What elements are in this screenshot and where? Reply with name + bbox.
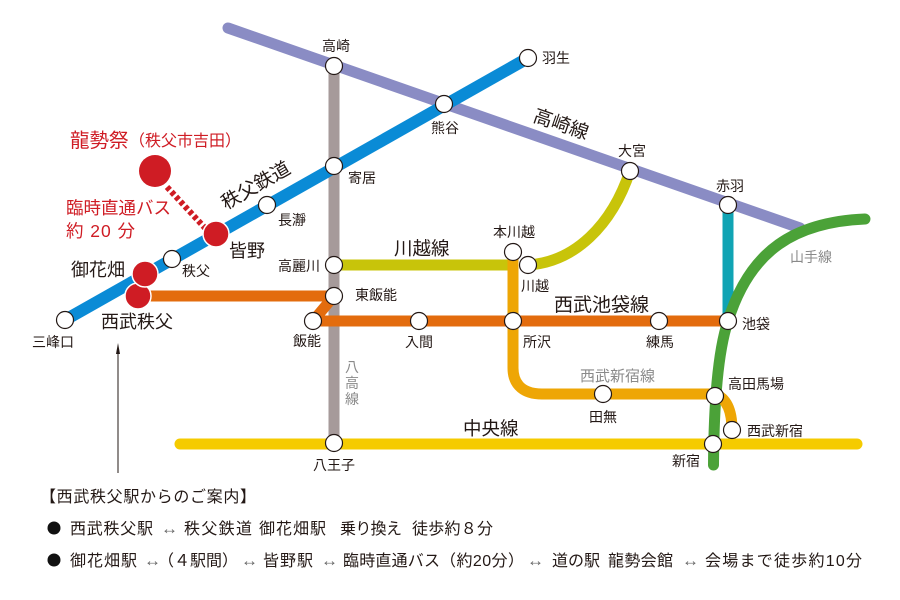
station: Komagawa: 高麗川 (278, 258, 320, 274)
station: Tokorozawa: 所沢 (523, 334, 551, 350)
label: Hachiko line: 高 (345, 375, 359, 391)
station: Mitsumineguchi (32, 312, 74, 350)
station: Akabane (716, 178, 744, 214)
station: Tokorozawa (504, 312, 551, 350)
guide: bus route: ↔ (241, 551, 258, 570)
guide: bus route: 御花畑駅 (70, 552, 137, 570)
station: Yorii: 寄居 (348, 170, 376, 186)
station: Seibu-Shinjuku: 西武新宿 (747, 423, 803, 439)
venue: Ryusei festival: （秩父市吉田） (129, 132, 241, 150)
station: Seibu-Chichibu (red): 西武秩父 (101, 312, 173, 332)
label: Chuo line: 中央線 (463, 418, 519, 439)
label: Chichibu railway: 秩父鉄道 (218, 157, 294, 214)
guide: bus route: 臨時直通バス (343, 552, 440, 570)
venue: Ryusei festival (70, 130, 241, 187)
station: Tanashi (589, 386, 617, 425)
station: Hanyu (520, 50, 570, 66)
station: Kumagaya (431, 96, 459, 136)
station: Shinjuku: 新宿 (672, 453, 700, 469)
guide: transfer route (48, 519, 493, 538)
guide: bus route: （約20分） (440, 552, 524, 570)
label: temporary bus (66, 198, 171, 241)
station: Hon-Kawagoe: 本川越 (493, 224, 535, 240)
station: Kawagoe (520, 256, 549, 294)
guide: bus route: 会場まで徒歩約10分 (705, 552, 862, 570)
station: Takasaki: 高崎 (322, 38, 350, 54)
station: Iruma (405, 312, 433, 350)
station: Hanno: 飯能 (293, 333, 321, 349)
station: Akabane: 赤羽 (716, 178, 744, 194)
label: temporary bus: 約 20 分 (66, 221, 136, 241)
guide: bus route: 龍勢会館 (608, 552, 673, 570)
station: Tanashi: 田無 (589, 409, 617, 425)
label: Seibu Shinjuku line: 西武新宿線 (580, 368, 655, 385)
guide: transfer route: ↔ (161, 519, 178, 538)
label: temporary bus: 臨時直通バス (66, 198, 171, 218)
line: Seibu Ikebukuro line (138, 296, 728, 321)
line: temporary bus route (167, 187, 205, 228)
station: Komagawa (278, 256, 342, 274)
venue: Ryusei festival: 龍勢祭 (70, 130, 129, 152)
guide: transfer route: 西武秩父駅 (70, 520, 153, 538)
line: Hachiko line (328, 66, 340, 443)
label: Takasaki line: 高崎線 (530, 105, 591, 144)
station: Minano (red): 皆野 (229, 241, 265, 261)
station: Nagatoro: 長瀞 (278, 212, 306, 228)
label: Hachiko line: 八 (345, 359, 359, 375)
station: Nerima (646, 312, 674, 350)
station: Hanyu: 羽生 (542, 50, 570, 66)
line: Kawagoe line (334, 171, 630, 265)
line: Chichibu railway (65, 58, 528, 320)
station: Ohanabatake (red): 御花畑 (71, 260, 125, 280)
station: Iruma: 入間 (405, 334, 433, 350)
guide: bus route: ↔ (144, 551, 161, 570)
station: Ikebukuro (720, 312, 770, 332)
station: Yorii (326, 158, 376, 186)
label: Hachiko line: 線 (345, 391, 359, 407)
guide: bus route: ↔ (682, 551, 699, 570)
station: Seibu-Shinjuku (724, 422, 803, 439)
guide: bus route: ↔ (527, 551, 544, 570)
station: Hanno (293, 312, 322, 349)
station: Higashi-Hanno (326, 287, 397, 304)
guide: bus route: （４駅間） (158, 552, 238, 570)
station: Hon-Kawagoe (493, 224, 535, 260)
station: Ikebukuro: 池袋 (742, 316, 770, 332)
station: Chichibu (164, 250, 210, 279)
station: Seibu-Chichibu (red) (101, 283, 173, 332)
station: Nerima: 練馬 (646, 334, 674, 350)
arrow: to Seibu-Chichibu (116, 343, 120, 473)
guide: transfer route: 徒歩約８分 (412, 520, 493, 538)
station: Shinjuku (672, 436, 722, 469)
line: Yamanote line (714, 219, 865, 465)
guide: transfer route: 秩父鉄道 (184, 520, 252, 538)
line: Seibu Shinjuku line (513, 252, 732, 430)
station: Takasaki (322, 38, 350, 74)
label: Seibu Ikebukuro line: 西武池袋線 (554, 294, 649, 316)
guide heading: 【西武秩父駅からのご案内】 (40, 488, 256, 506)
guide: bus route: ↔ (321, 551, 338, 570)
line: Takasaki line (228, 28, 800, 228)
station: Minano (red) (203, 221, 265, 261)
station: Kumagaya: 熊谷 (431, 120, 459, 136)
station: Ohanabatake (red) (71, 260, 158, 287)
label: Kawagoe line: 川越線 (394, 238, 450, 259)
station: Higashi-Hanno: 東飯能 (355, 287, 397, 303)
guide: transfer route: 乗り換え (340, 520, 402, 538)
station: Kawagoe: 川越 (521, 278, 549, 294)
station: Hachioji: 八王子 (313, 457, 355, 473)
guide: bus route (48, 551, 862, 570)
label: Hachiko line (345, 359, 359, 407)
guide: transfer route: 御花畑駅 (259, 520, 326, 538)
guide: bus route: 皆野駅 (263, 552, 313, 570)
station: Takadanobaba (706, 376, 784, 404)
station: Hachioji (313, 434, 355, 473)
station: Chichibu: 秩父 (182, 263, 210, 279)
station: Mitsumineguchi: 三峰口 (32, 334, 74, 350)
guide: bus route: 道の駅 (552, 552, 600, 570)
station: Nagatoro (258, 196, 306, 228)
station: Takadanobaba: 高田馬場 (728, 376, 784, 392)
station: Omiya (618, 143, 646, 180)
station: Omiya: 大宮 (618, 143, 646, 159)
label: Yamanote line: 山手線 (790, 249, 832, 265)
line: Akabane connector (722, 205, 734, 321)
line: Chuo line (180, 438, 857, 450)
